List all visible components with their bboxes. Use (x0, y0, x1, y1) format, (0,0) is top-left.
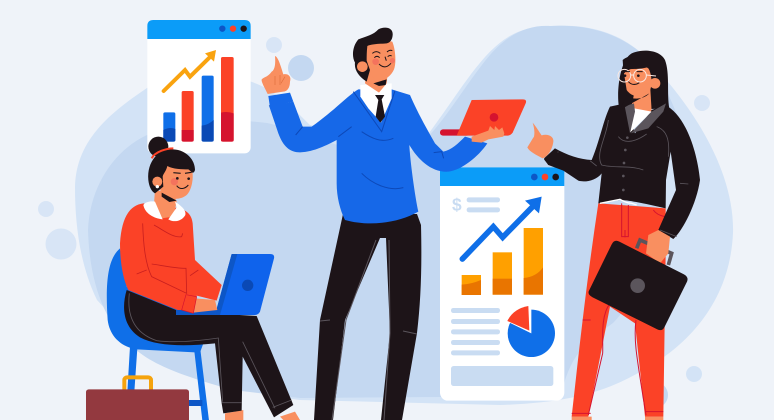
chair (107, 248, 209, 420)
lapels (625, 103, 666, 133)
window dots (219, 25, 247, 32)
person: standing woman (527, 51, 700, 420)
feet (572, 417, 663, 420)
laptop (440, 99, 526, 136)
feet (225, 410, 300, 420)
card header (147, 20, 251, 39)
darker blob (88, 26, 678, 400)
cuff (544, 148, 558, 165)
glasses (618, 69, 656, 82)
card body (147, 20, 251, 153)
blouse (630, 108, 652, 133)
chart card: right (440, 167, 564, 401)
head (148, 137, 195, 202)
trend arrow (164, 50, 216, 91)
tie (375, 95, 385, 123)
trousers (124, 290, 293, 417)
briefcase handle (637, 240, 672, 265)
briefcase (589, 241, 688, 330)
hair (618, 51, 669, 110)
pointing hand (527, 123, 553, 158)
dollar label (452, 194, 500, 214)
light blob (75, 26, 733, 405)
dollar label: $ (452, 194, 462, 214)
card header (440, 167, 564, 186)
person: seated woman (86, 137, 300, 420)
face (618, 54, 665, 110)
cuff (268, 93, 293, 107)
shirt (360, 83, 392, 123)
bars (163, 57, 234, 142)
neck (154, 190, 177, 218)
carrying hand (646, 230, 670, 263)
floating circles (38, 37, 710, 408)
cuff (182, 295, 197, 313)
trend arrow (462, 197, 542, 259)
window dots (531, 174, 559, 180)
chart card: top left (147, 20, 251, 153)
hand (193, 298, 217, 313)
bars (462, 228, 543, 295)
collar (143, 201, 186, 221)
neck (632, 83, 652, 120)
pie chart (507, 306, 555, 357)
trousers (314, 214, 421, 420)
text lines (451, 308, 500, 355)
blazer (544, 103, 700, 239)
person: centre man (262, 28, 526, 420)
sweater (120, 203, 222, 313)
holding hand (472, 126, 504, 143)
trousers (572, 203, 666, 417)
sweater (269, 89, 487, 223)
pointing hand (262, 56, 290, 94)
briefcase (86, 377, 189, 420)
neck and face (353, 28, 395, 93)
hair (353, 28, 393, 82)
summary box (451, 366, 553, 386)
card body (440, 167, 564, 401)
laptop (176, 254, 274, 315)
